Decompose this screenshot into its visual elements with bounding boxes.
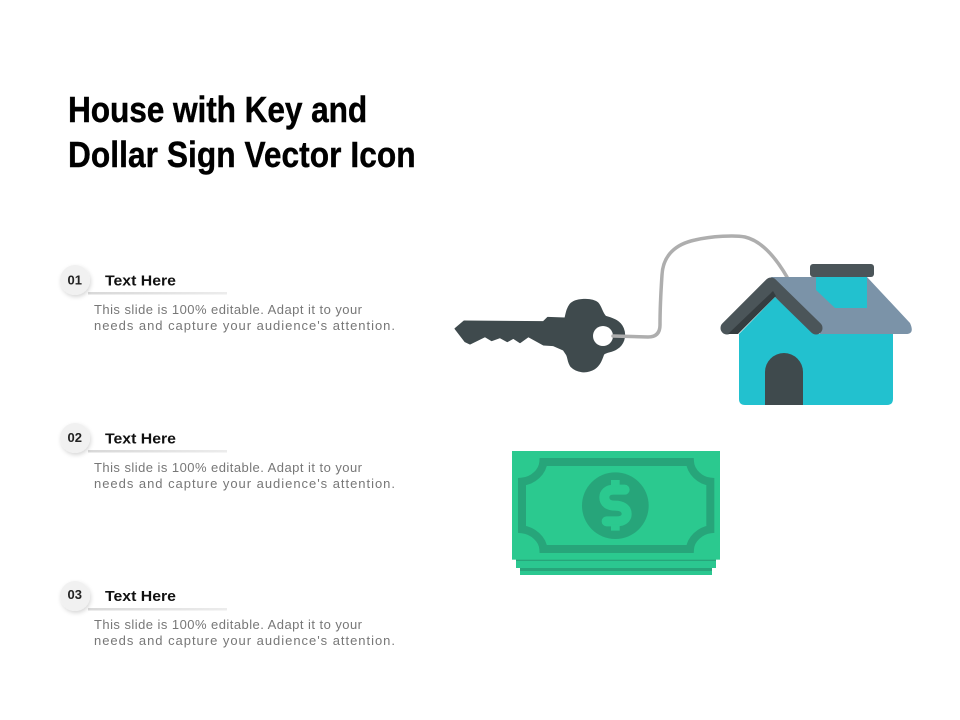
description 03: needs and capture your audience's attention. <box>94 633 395 648</box>
divider and number badge 02: 02 <box>68 430 82 445</box>
list item 01 <box>60 265 395 333</box>
divider and number badge 01: 01 <box>68 272 82 288</box>
door <box>765 353 803 405</box>
title: House with Key and <box>68 90 367 130</box>
dollar coin <box>582 472 649 539</box>
description 03: This slide is 100% editable. Adapt it to your <box>94 617 363 632</box>
divider and number badge 03 <box>60 581 227 611</box>
heading 02: Text Here <box>105 430 176 448</box>
chimney <box>816 277 867 308</box>
description 02: needs and capture your audience's attention. <box>94 476 395 491</box>
divider and number badge 02 <box>60 423 227 453</box>
icon: dollar bill stack <box>512 451 720 575</box>
description 02: This slide is 100% editable. Adapt it to your <box>94 460 363 475</box>
description 01 <box>94 302 395 333</box>
chimney cap <box>810 264 874 277</box>
divider and number badge 01 <box>60 265 227 295</box>
description 02 <box>94 460 395 491</box>
title <box>68 90 416 175</box>
key hole <box>593 326 613 346</box>
dollar sign <box>604 480 627 531</box>
icon: house <box>727 264 912 405</box>
description 01: This slide is 100% editable. Adapt it to your <box>94 302 363 317</box>
cord <box>613 236 787 337</box>
divider and number badge 03: 03 <box>68 587 82 602</box>
roof slope <box>771 277 912 334</box>
house body <box>739 297 893 405</box>
lower bills <box>516 559 716 575</box>
heading 03: Text Here <box>105 588 176 605</box>
icon: key <box>455 299 625 372</box>
icon: key on a cord <box>455 236 787 372</box>
roof gable <box>727 284 816 328</box>
title: Dollar Sign Vector Icon <box>68 135 416 175</box>
heading 01: Text Here <box>105 272 176 290</box>
list item 02 <box>60 423 395 491</box>
description 01: needs and capture your audience's attention. <box>94 318 395 333</box>
bill border <box>522 462 710 549</box>
top bill <box>512 451 720 560</box>
roof inner shadow <box>728 291 776 334</box>
description 03 <box>94 617 395 648</box>
list item 03 <box>60 581 395 648</box>
